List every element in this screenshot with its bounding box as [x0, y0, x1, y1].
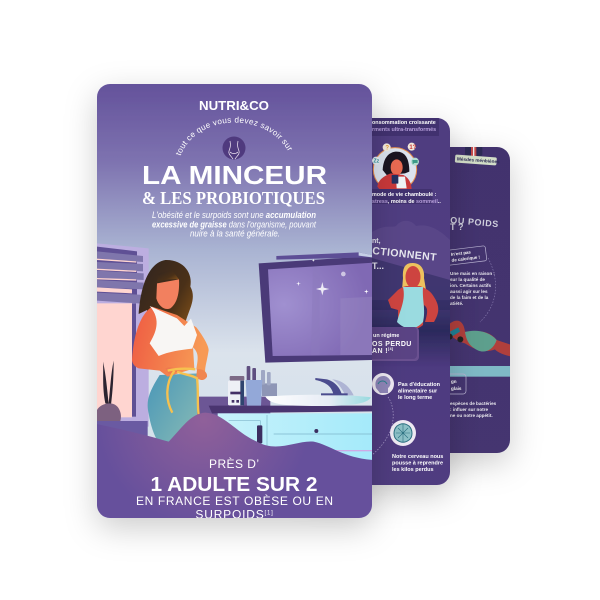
statistic: près d'un adulte sur 2: EN FRANCE EST OBÈSE OU EN	[136, 493, 333, 508]
floor	[97, 421, 148, 436]
card: middle page on failing diets	[372, 113, 465, 510]
intro paragraph: nuire à la santé générale.	[190, 228, 280, 238]
badge: ménopause illustration: Mésdes ménbiènes	[457, 156, 500, 164]
illustration: woman with phone in circle: 1?	[409, 145, 417, 151]
intro paragraph: excessive de graisse dans l'organisme, pouvant	[152, 220, 316, 230]
intro paragraph: L'obésité et le surpoids sont une accumulation	[152, 210, 316, 220]
title: LA MINCEUR	[142, 162, 327, 190]
text box: mode de vie: mode de vie chamboulé :	[372, 192, 437, 198]
text block: pas d'éducation: le long terme	[398, 395, 432, 401]
heading: fonctionnent: nt,	[372, 238, 381, 245]
text box: consommation: rments ultra-transformés	[372, 127, 436, 133]
text block: cerveau: Notre cerveau nous	[392, 454, 443, 460]
window	[96, 243, 149, 427]
card: main cover	[82, 79, 387, 543]
icon: head	[372, 373, 394, 395]
statistic: près d'un adulte sur 2: SURPOIDS	[195, 508, 264, 522]
curved tagline: tout ce que vous devez savoir sur	[176, 116, 292, 156]
illustration: woman with phone in circle: ?	[385, 146, 389, 152]
illustration: woman with phone in circle	[372, 143, 419, 191]
statistic: près d'un adulte sur 2: [1]	[264, 510, 274, 516]
tag: régime	[450, 374, 466, 394]
text block: microbiote: espèces de bactéries	[450, 401, 497, 406]
cabinet details	[229, 415, 372, 451]
logo: NUTRI&CO	[199, 99, 269, 113]
text block: pas d'éducation	[398, 382, 441, 401]
callout: régime box	[372, 327, 419, 361]
text box: mode de vie: stress, moins de sommeil..	[372, 199, 441, 205]
heading: fonctionnent: CTIONNENT	[372, 245, 438, 264]
illustration: bathroom scene	[96, 243, 374, 467]
callout: régime box: AN !	[372, 348, 388, 355]
bubbles	[383, 143, 391, 151]
text block: rééquilibrage: ion. Certains actifs	[450, 283, 492, 288]
text block: rééquilibrage: aussi agir sur les	[450, 289, 488, 294]
faucet	[315, 378, 354, 395]
mirror	[259, 252, 374, 363]
callout: régime box: [4]	[388, 347, 393, 351]
heading: prendre du poids: OU POIDS	[450, 215, 499, 229]
text block: microbiote: : influer sur notre	[450, 407, 488, 412]
subtitle: & LES PROBIOTIQUES	[142, 188, 325, 208]
woman	[132, 260, 209, 460]
text block: rééquilibrage: sur la qualité de	[450, 277, 485, 282]
tag text	[451, 380, 462, 391]
icon: brain	[390, 420, 416, 446]
statistic: près d'un adulte sur 2: 1 ADULTE SUR 2	[150, 474, 318, 496]
heading: fonctionnent: T...	[372, 261, 384, 271]
text block: microbiote: ne ou notre appétit.	[450, 413, 493, 418]
callout: régime box: un régime	[373, 333, 399, 339]
cloud background	[372, 221, 450, 280]
dotted arc	[480, 258, 496, 322]
text box: mode de vie	[372, 189, 440, 204]
tag text: gn	[451, 379, 457, 384]
text block: rééquilibrage: atiété.	[450, 301, 463, 306]
plant and vase	[97, 360, 121, 421]
bottom wave	[96, 413, 374, 520]
heading: prendre du poids: T ?	[450, 222, 464, 232]
tag: calories: de calorique !	[451, 254, 481, 263]
tag: calories: In'est pas	[451, 249, 472, 257]
text block: cerveau: pousse à reprendre	[392, 460, 443, 466]
tag text: glais	[451, 386, 462, 391]
text block: rééquilibrage: Une mais en raison :	[450, 271, 495, 276]
counter	[209, 406, 374, 413]
sparkles	[296, 259, 369, 295]
back wall strip	[197, 396, 270, 416]
illustration: woman with phone in circle: Zz	[373, 159, 380, 165]
text box: consommation: onsommation croissante	[372, 120, 436, 126]
cabinet top	[218, 413, 374, 467]
text block: cerveau	[392, 454, 443, 473]
statistic: près d'un adulte sur 2: PRÈS D’	[209, 456, 259, 471]
illustration: blonde woman	[388, 263, 438, 329]
navy band	[372, 258, 450, 310]
illustration: woman doing plank	[450, 320, 510, 377]
badge: ménopause illustration	[455, 146, 500, 165]
statistic: près d'un adulte sur 2	[136, 456, 333, 522]
sink basin	[265, 395, 371, 406]
card: back page on weight regain	[450, 142, 525, 478]
text block: microbiote	[450, 401, 497, 418]
heading: fonctionnent	[372, 238, 438, 271]
text block: pas d'éducation: alimentaire sur	[398, 388, 438, 394]
dotted arc	[372, 397, 393, 455]
callout: régime box: OS PERDU	[372, 341, 412, 348]
text block: cerveau: les kilos perdus	[392, 467, 434, 473]
toothbrushes and cup	[246, 366, 277, 406]
text block: pas d'éducation: Pas d'éducation	[398, 382, 441, 388]
icon: silhouette	[222, 136, 246, 160]
tag: calories	[450, 246, 487, 266]
text block: rééquilibrage	[450, 271, 495, 306]
text box: consommation	[372, 118, 439, 136]
intro paragraph	[152, 210, 316, 238]
supplement jar	[228, 376, 244, 405]
text block: rééquilibrage: de la faim et de la	[450, 295, 489, 300]
